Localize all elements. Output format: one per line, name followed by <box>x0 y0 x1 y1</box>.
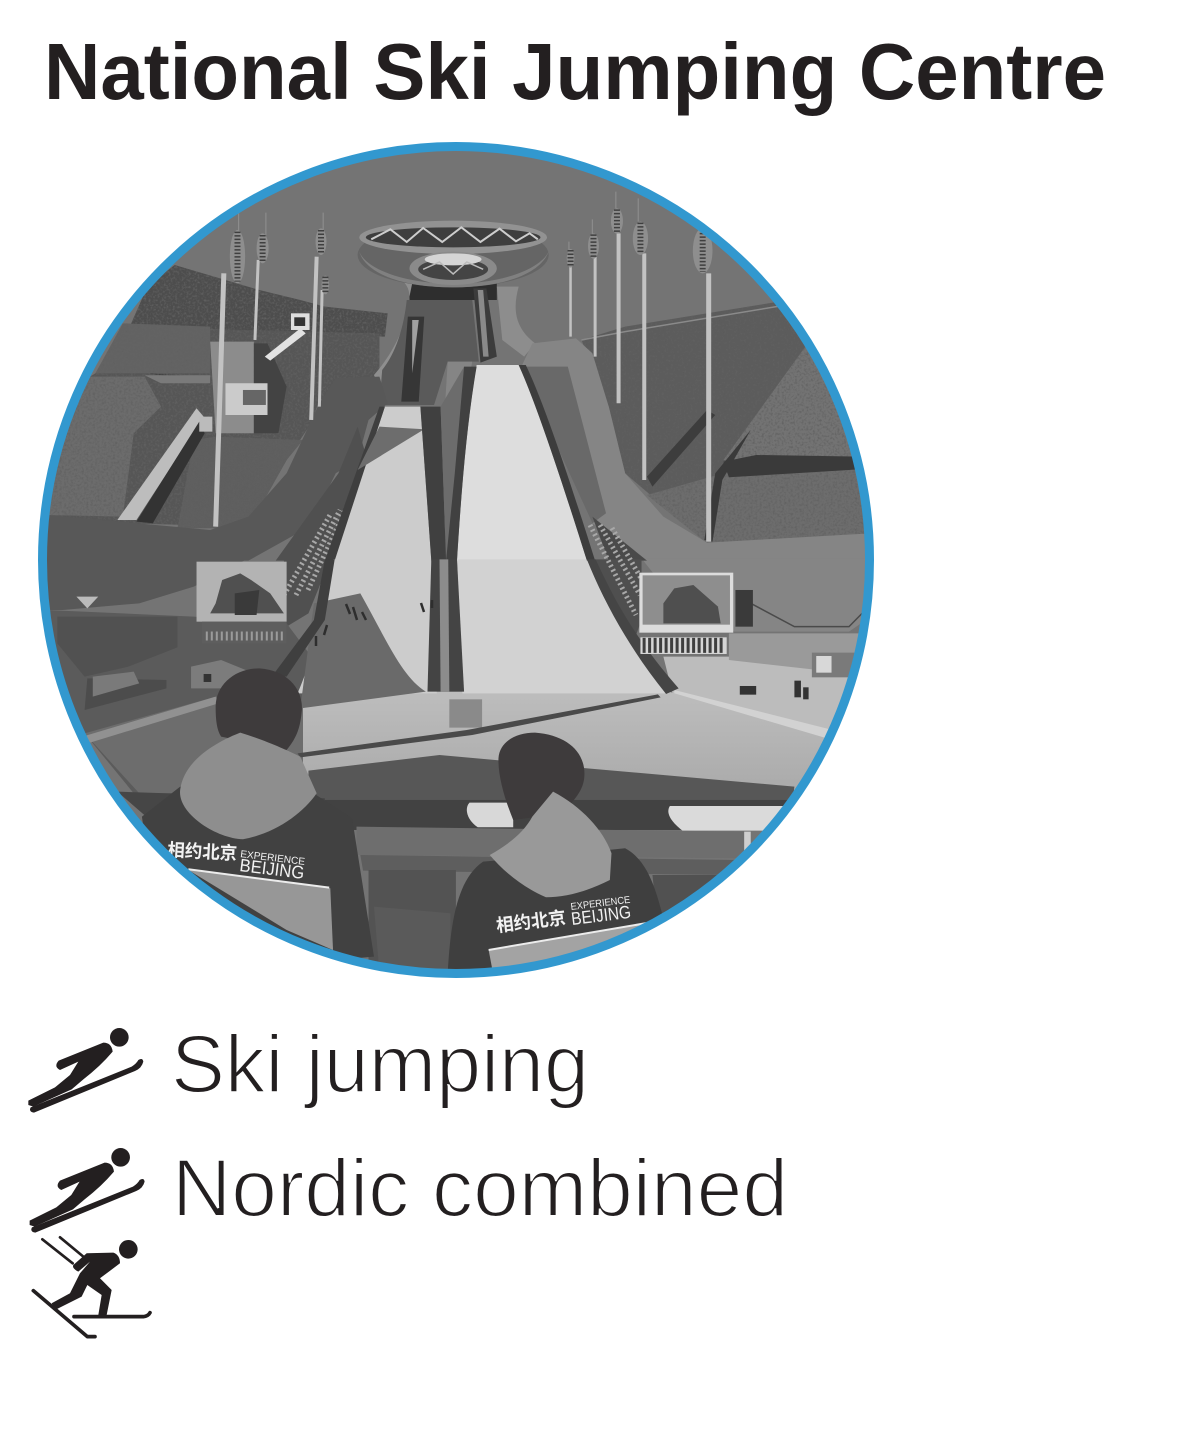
large screen right <box>639 573 753 654</box>
floodlight heads <box>230 208 712 294</box>
lower left ground <box>46 597 314 800</box>
left landing roof <box>46 377 388 610</box>
shadows on the run-out <box>298 694 794 808</box>
jacket logo left: BEIJING <box>239 855 305 883</box>
icon: ski jumping for Nordic combined <box>30 1148 145 1233</box>
icon: ski jumping <box>28 1028 143 1113</box>
sky <box>30 140 880 980</box>
spectator left <box>142 668 374 960</box>
right landing roof <box>521 338 871 632</box>
icon: cross-country skier <box>33 1237 150 1337</box>
label: ski jumping: Ski jumping <box>171 1019 589 1110</box>
jacket logo right: EXPERIENCE <box>570 895 631 913</box>
tower ring and legs <box>358 221 549 407</box>
barrier rail and wall <box>117 792 790 977</box>
small figures on the slope <box>316 600 432 646</box>
jacket logo left <box>168 840 305 878</box>
left far building and funicular <box>117 313 310 523</box>
jacket logo right: BEIJING <box>570 902 632 929</box>
jacket logo left: 相约北京 <box>167 839 238 864</box>
floodlight poles <box>216 192 709 542</box>
jacket logo right: 相约北京 <box>495 907 567 936</box>
label: Nordic combined: Nordic combined <box>172 1143 788 1234</box>
lower right ground <box>664 633 858 738</box>
blue circle border <box>42 146 870 974</box>
left jump slope <box>273 407 437 708</box>
central divider <box>420 367 477 692</box>
spectator right <box>448 733 663 973</box>
large screen left <box>197 562 287 643</box>
jacket logo right <box>496 896 630 934</box>
photo: ski jumping venue in a blue circle <box>30 140 880 980</box>
run-out area <box>303 692 838 793</box>
right hill shadows and trees <box>581 305 861 542</box>
spectator stands <box>276 427 647 635</box>
hillsides with grain <box>46 265 871 543</box>
title: National Ski Jumping Centre <box>44 27 1106 116</box>
jacket logo left: EXPERIENCE <box>240 849 306 868</box>
right jump slope <box>457 365 679 694</box>
